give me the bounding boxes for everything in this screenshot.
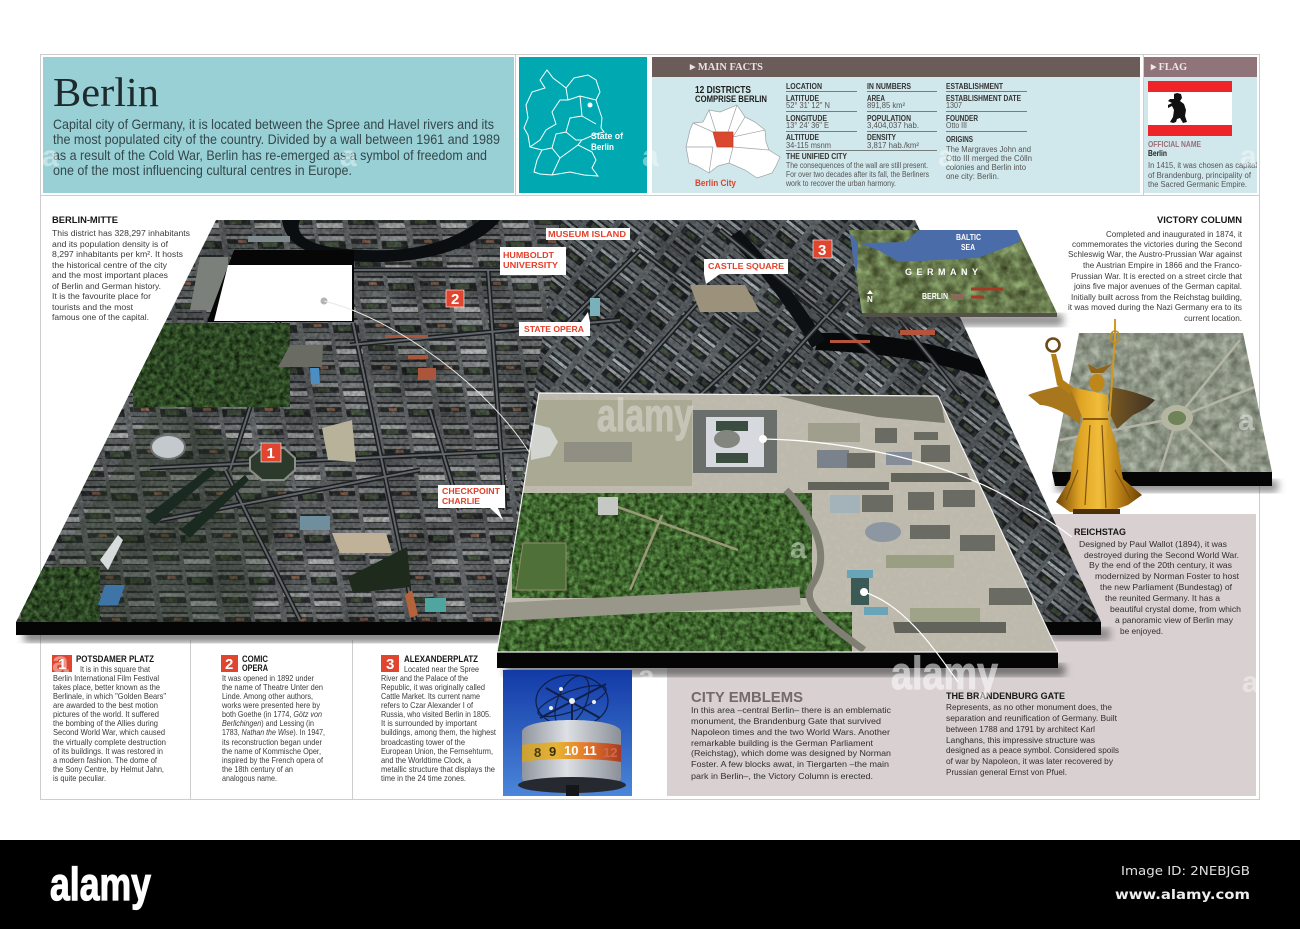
column 1: Potsdamer Platz: Berlin International Film Festival (53, 673, 159, 683)
column 2: Comic Opera: Linde. Among other authors, (222, 691, 313, 701)
text: The Brandenburg Gate: THE BRANDENBURG GATE (946, 691, 1066, 702)
label: Berlin City: Berlin City (695, 178, 737, 189)
text: Reichstag: Designed by Paul Wallot (1894), it was (1079, 539, 1227, 549)
column 3: Alexanderplatz: European Union, the Fernsehturm, (381, 746, 493, 756)
shadow under Reichstag map (505, 664, 1065, 676)
column 1: Potsdamer Platz: are awarded to the best motion (53, 700, 158, 710)
text: the unified city (785, 152, 929, 188)
facts: in numbers: POPULATION (867, 114, 911, 123)
raised arm (1051, 354, 1074, 394)
text: City Emblems: monument, the Brandenburg Gate that survived (691, 716, 881, 726)
heading: flag: ▸ FLAG (1150, 61, 1187, 73)
text: Berlin-Mitte: famous one of the capital. (52, 312, 149, 322)
districts heading: 12 DISTRICTS (695, 85, 751, 96)
avenue and roundabout (500, 596, 800, 612)
facts: in numbers (867, 82, 937, 150)
text: official name: In 1415, it was chosen as capital (1148, 161, 1257, 170)
aerial of roundabout (1050, 330, 1275, 475)
facts: location: ALTITUDE (786, 133, 820, 142)
column 3: Alexanderplatz: Russia, who visited Berlin in 1805. (381, 709, 491, 719)
text: Berlin-Mitte: of Berlin and German history. (52, 281, 161, 291)
alamy watermarks: a (340, 140, 357, 173)
text: Berlin-Mitte: and the most important places (52, 270, 168, 280)
text: Berlin-Mitte: tourists and the most (52, 302, 134, 312)
left wing (1028, 384, 1082, 425)
text: The Brandenburg Gate: between 1788 and 1791 by architect Karl (946, 724, 1095, 734)
canal (41, 567, 100, 620)
facts: in numbers: 3,404,037 hab. (867, 121, 919, 130)
label: Checkpoint Charlie: CHARLIE (442, 496, 480, 506)
text: Reichstag: beautiful crystal dome, from which (1110, 604, 1241, 614)
Berlin area marker (951, 294, 963, 300)
text: City Emblems: Napoleon times and the two World Wars. Another (691, 727, 890, 737)
text: Berlin-Mitte: the historical centre of the city (52, 260, 168, 270)
right wing (1108, 387, 1155, 429)
text: the unified city: For over two decades after its fall, the Berliners (786, 170, 929, 179)
label: Checkpoint Charlie: CHECKPOINT (442, 486, 501, 496)
marker 2: 2 (451, 291, 459, 308)
marker 3: 3 (818, 242, 826, 259)
column 2: Comic Opera: the name of Kommische Oper, (222, 746, 321, 756)
text: Berlin-Mitte: This district has 328,297 inhabitants (52, 228, 190, 238)
facts: in numbers: 891,85 km² (867, 101, 905, 110)
inset: Victory Column (1028, 319, 1278, 514)
text: official name: of Brandenburg, principality of (1148, 171, 1252, 180)
Spree bend (779, 396, 945, 423)
hour numbers: 9 (549, 744, 556, 759)
label: State of Berlin: Berlin (591, 142, 614, 152)
text: official name: OFFICIAL NAME (1148, 140, 1202, 149)
greener south-west (16, 400, 290, 622)
website: www.alamy.com (1115, 888, 1250, 903)
column 1: Potsdamer Platz: takes place, better known as the (53, 682, 160, 692)
facts: location: LOCATION (786, 82, 822, 91)
facts: in numbers: AREA (867, 94, 885, 103)
facts: establishment: 1307 (946, 101, 962, 110)
column 2: Comic Opera: both Goethe (in 1774, Götz von (222, 709, 322, 719)
label: Humboldt University (500, 247, 566, 275)
facts: in numbers: 3,817 hab./km² (867, 141, 919, 150)
open sandy ground (332, 533, 392, 553)
Brandenburg Gate dot (860, 588, 868, 596)
Spree river (282, 220, 500, 262)
Reichstag (693, 410, 777, 473)
text: Victory Column: current location. (1184, 313, 1242, 323)
text: Berlin-Mitte: BERLIN-MITTE (52, 215, 119, 226)
blue and coloured roofs (310, 368, 320, 384)
badge 2: 2 (225, 656, 233, 673)
column 3: Alexanderplatz: Republic, it was originally called (381, 682, 485, 692)
hour numbers: 12 (603, 745, 617, 760)
heading: ALEXANDERPLATZ (404, 654, 478, 665)
column 1: Potsdamer Platz: the bombing of the Allies during (53, 718, 158, 728)
heading: OPERA (242, 663, 268, 674)
facts: establishment: Otto III merged the Cölln (946, 154, 1032, 163)
heading: main facts: ▸ MAIN FACTS (689, 61, 763, 73)
text: official name (1148, 140, 1257, 189)
text: official name: the Sacred Germanic Empire. (1148, 180, 1247, 189)
badge 1: 1 (58, 656, 66, 673)
column 2: Comic Opera: its reconstruction began under (222, 737, 322, 747)
label: Castle Square (704, 259, 788, 284)
label: Humboldt University: UNIVERSITY (503, 260, 558, 270)
map side base (16, 622, 1101, 635)
inset map: Germany and the Baltic Sea (840, 225, 1065, 326)
facts: location: 34-115 msnm (786, 141, 831, 150)
leader line: Brandenburg Gate (864, 592, 958, 682)
map: Berlin districts (686, 105, 780, 178)
location dot (320, 298, 328, 304)
staff (1108, 319, 1115, 439)
text: Berlin-Mitte: and its population density is of (52, 239, 169, 249)
facts: establishment: ESTABLISHMENT (946, 82, 1003, 91)
text: Reichstag: REICHSTAG (1074, 527, 1126, 538)
text: Reichstag: modernized by Norman Foster to host (1095, 571, 1240, 581)
column 3: Alexanderplatz: buildings, among them, the highest (381, 727, 497, 737)
facts: establishment: ESTABLISHMENT DATE (946, 94, 1022, 103)
column 3: Alexanderplatz: refers to Czar Alexander I of (381, 700, 474, 710)
text: Reichstag: destroyed during the Second World War. (1084, 550, 1239, 560)
cut-out panel for Berlin-Mitte text (207, 250, 354, 322)
government district buildings (808, 423, 1032, 633)
facts: establishment: The Margraves John and (946, 145, 1031, 154)
column 2: Comic Opera: analogous name. (222, 773, 277, 783)
alamy watermarks: a (1238, 404, 1255, 437)
label: State of Berlin (591, 131, 624, 152)
alamy watermarks: a (638, 660, 655, 693)
text: Victory Column: it was moved during the Nazi Germany era to its (1068, 302, 1242, 312)
marker 1 (261, 443, 281, 462)
alamy watermarks: a (938, 140, 955, 173)
column 3: Alexanderplatz: River and the Palace of the (381, 673, 468, 683)
text: Victory Column: the Austrian Empire in 1866 and the Franco- (1083, 260, 1242, 270)
detail map: Reichstag and Brandenburg Gate (490, 390, 1065, 668)
panel: Germany locator map (519, 57, 647, 193)
major streets: carriageway (150, 230, 960, 620)
Tiergarten park (133, 323, 290, 407)
robe folds (1066, 425, 1130, 508)
main map: Berlin-Mitte aerial view (0, 220, 1110, 635)
label: State of Berlin: State of (591, 131, 624, 141)
panel: main facts (652, 57, 1140, 193)
text: Victory Column: VICTORY COLUMN (1157, 215, 1242, 226)
red river labels (971, 289, 1003, 297)
hours band (522, 742, 621, 762)
facts: establishment: Otto III (946, 121, 967, 130)
Sony Centre dome (151, 435, 185, 459)
text: The Brandenburg Gate: Represents, as no other monument does, the (946, 702, 1112, 712)
city label: BERLIN (922, 292, 948, 301)
label: State Opera (519, 312, 590, 336)
column 1: Potsdamer Platz: Berlinale, in which "Golden Bears" (53, 691, 166, 701)
aerial surface (0, 220, 1110, 622)
photo: Worldtime Clock (503, 670, 632, 797)
text: Berlin-Mitte: It is the favourite place for (52, 291, 151, 301)
heading (242, 654, 268, 674)
panel: title and introduction (43, 57, 514, 193)
facts: establishment (946, 82, 1032, 181)
text: City Emblems: In this area –central Berlin– there is an emblematic (691, 705, 892, 715)
label: Castle Square: CASTLE SQUARE (708, 261, 784, 271)
text: City Emblems: CITY EMBLEMS (691, 689, 803, 706)
facts: establishment: FOUNDER (946, 114, 978, 123)
facts: location (786, 82, 937, 150)
heading: COMIC (242, 654, 268, 665)
text: Victory Column (1068, 215, 1243, 323)
text: City Emblems: park in Berlin–, the Victory Column is erected. (691, 771, 873, 781)
text: Reichstag (1074, 527, 1241, 636)
alamy watermarks: alamy (891, 647, 998, 699)
text: Victory Column: Completed and inaugurated in 1874, it (1106, 229, 1243, 239)
label: Humboldt University: HUMBOLDT (503, 250, 555, 260)
alamy watermarks: a (1240, 140, 1257, 173)
facts: location: 13° 24' 36" E (786, 121, 829, 130)
statue: Goddess Victoria (1028, 319, 1155, 514)
Tiergarten forest (512, 493, 812, 598)
head and helmet (1090, 374, 1104, 392)
column 1: Potsdamer Platz: a modern fashion. The dome of (53, 755, 158, 765)
column 1: Potsdamer Platz: the Sony Centre, by Helmut Jahn, (53, 764, 164, 774)
text: City Emblems: remarkable building is the German Parliament (691, 738, 874, 748)
column 2: Comic Opera: the 18th century of an (222, 764, 293, 774)
text: Victory Column: Prussian War. It is erected on a street circle that (1071, 271, 1243, 281)
text: Berlin-Mitte: 8,297 inhabitants per km². It hosts (52, 249, 183, 259)
inset base (1052, 472, 1272, 486)
alamy watermarks: a (52, 646, 69, 679)
text: Reichstag: be enjoyed. (1120, 626, 1163, 636)
leader line: Reichstag (763, 439, 1072, 537)
robe (1056, 387, 1142, 514)
column 2: Comic Opera: works were presented here by (221, 700, 321, 710)
green patches (21, 567, 100, 622)
text: Reichstag: By the end of the 20th century, it was (1089, 560, 1232, 570)
column 3: Alexanderplatz: and the Worldtime Clock, a (381, 755, 471, 765)
column 1: Potsdamer Platz: is quite peculiar. (53, 773, 106, 783)
footer logo: alamy (50, 858, 151, 910)
hour numbers: 10 (564, 743, 578, 758)
text: the unified city: The consequences of the wall are still present. (786, 161, 928, 170)
hour numbers: 8 (534, 745, 541, 760)
panel: flag (1144, 57, 1257, 193)
facts: location: 52° 31' 12" N (786, 101, 830, 110)
text: The Brandenburg Gate: Langhans, this impressive structure was (946, 735, 1095, 745)
Brandenburg Gate (851, 578, 869, 605)
plinth (1073, 509, 1120, 514)
column 1: Potsdamer Platz: the virtually complete destruction (53, 737, 166, 747)
armillary sphere (535, 674, 609, 722)
text: City Emblems (691, 689, 892, 781)
label: Checkpoint Charlie (438, 485, 505, 520)
text: Victory Column: Schleswig War, the Austro-Prussian War against (1068, 249, 1243, 259)
text: Victory Column: joins five major avenues of the German capital. (1073, 281, 1242, 291)
text: City Emblems: Foster. A few blocks awat, in Tiergarten –the main (691, 759, 889, 769)
clock drum (522, 720, 621, 782)
marker 3 (813, 240, 832, 259)
alamy watermarks: alamy (597, 389, 693, 441)
column 3: Alexanderplatz: Cattle Market. Its current name (381, 691, 480, 701)
facts: establishment: colonies and Berlin into (946, 163, 1027, 172)
heading: POTSDAMER PLATZ (76, 654, 154, 665)
text: The Brandenburg Gate: of war by Napoleon, it was later recovered by (946, 756, 1114, 766)
white edge of detail map (497, 393, 1058, 652)
image id: Image ID: 2NEBJGB (1121, 864, 1250, 878)
text: Victory Column: commemorates the victories during the Second (1072, 239, 1242, 249)
label: Museum Island: MUSEUM ISLAND (548, 229, 626, 239)
text: The Brandenburg Gate: Prussian general Ernst von Pfuel. (946, 767, 1067, 777)
column 3: Alexanderplatz: It is surrounded by important (381, 718, 478, 728)
column 3: Alexanderplatz: Located near the Spree (404, 664, 479, 674)
marker 2 (446, 290, 464, 308)
text: the unified city: THE UNIFIED CITY (786, 152, 848, 161)
alamy watermarks (42, 140, 1259, 699)
Potsdamer Platz octagon (250, 448, 295, 480)
text: the unified city: work to recover the urban harmony. (785, 179, 896, 188)
map labels and number markers (261, 228, 832, 520)
footer band (0, 840, 1300, 929)
facts: location: LONGITUDE (786, 114, 828, 123)
facts: in numbers: IN NUMBERS (867, 82, 912, 91)
badge 3: 3 (386, 656, 394, 673)
shadow under main map (24, 630, 504, 642)
column 3: Alexanderplatz: broadcasting tower of the (381, 737, 465, 747)
column 2: Comic Opera: 1783, Nathan the Wise). In 1947, (222, 727, 325, 737)
Baltic Sea (858, 229, 1020, 262)
plaza (520, 400, 692, 486)
country label: GERMANY (905, 267, 978, 277)
introduction text: one of the most influencing cultural centres in Europe. (53, 162, 352, 178)
paths in forest (615, 506, 738, 590)
north arrow (867, 290, 873, 304)
page frame (40, 54, 1260, 800)
column 1: Potsdamer Platz: Second World War, which caused (53, 727, 165, 737)
introduction text (53, 116, 500, 178)
text: City Emblems: (Reichstag), which dome was designed by Norman (691, 748, 891, 758)
column 3: Alexanderplatz: time in the 24 time zones. (381, 773, 466, 783)
column 2: Comic Opera: inspired by the French opera of (222, 755, 324, 765)
introduction text: Capital city of Germany, it is located between the Spree and Havel rivers and its (53, 116, 494, 132)
text: official name: Berlin (1148, 148, 1167, 158)
alamy watermarks: a (642, 140, 659, 173)
hour numbers (534, 746, 617, 757)
column 2: Comic Opera: Berlichingen) and Lessing (in (222, 718, 314, 728)
map of Germany (524, 70, 604, 176)
title: Berlin (53, 69, 159, 115)
districts heading (695, 85, 767, 104)
column 1: Potsdamer Platz: It is in this square that (80, 664, 151, 674)
column 3: Alexanderplatz: metallic structure that displays the (381, 764, 495, 774)
facts: location: LATITUDE (786, 94, 820, 103)
text: The Brandenburg Gate: designed as a peace symbol. Considered spoils (946, 745, 1119, 755)
column 1: Potsdamer Platz: of its buildings. It was restored in (53, 746, 163, 756)
introduction text: as a result of the Cold War, Berlin has re-emerged as a symbol of freedom and (53, 147, 487, 163)
text: Berlin-Mitte (52, 215, 190, 322)
text: The Brandenburg Gate: separation and reunification of Germany. Built (946, 713, 1118, 723)
column 2: Comic Opera (221, 654, 325, 783)
facts: in numbers: DENSITY (867, 133, 897, 142)
facts: establishment: one city: Berlin. (946, 172, 999, 181)
text: Reichstag: a panoramic view of Berlin may (1115, 615, 1234, 625)
detail map base (497, 652, 1058, 668)
districts heading: COMPRISE BERLIN (695, 94, 767, 104)
facts: establishment: ORIGINS (946, 135, 974, 144)
north arrow: N (867, 295, 873, 304)
sea label (956, 233, 981, 252)
Reichstag dot (759, 435, 767, 443)
Berlin marker (588, 102, 592, 108)
icon: flag of Berlin with bear (1148, 81, 1232, 136)
drum underside (518, 777, 626, 793)
alamy watermarks: a (42, 140, 59, 173)
sea label: SEA (961, 243, 975, 252)
label: State Opera: STATE OPERA (524, 324, 584, 334)
hour numbers: 11 (583, 743, 597, 758)
column 3: Alexanderplatz (381, 654, 497, 783)
text: Victory Column: Initially built across from the Reichstag building, (1071, 292, 1242, 302)
alamy watermarks: a (790, 532, 807, 565)
wreath (1046, 338, 1060, 352)
major streets: shadow (150, 230, 960, 620)
text: Reichstag: the new Parliament (Bundestag) of (1100, 582, 1233, 592)
column 2: Comic Opera: It was opened in 1892 under (222, 673, 314, 683)
marker 1: 1 (266, 445, 275, 462)
column 2: Comic Opera: the name of Theatre Unter den (222, 682, 323, 692)
text: Reichstag: the reunited Germany. It has a (1105, 593, 1220, 603)
column 1: Potsdamer Platz: pictures of the world. It suffered (53, 709, 159, 719)
panel: city emblems background (667, 514, 1256, 796)
text: The Brandenburg Gate (946, 691, 1119, 777)
introduction text: the most populated city of the country. Divided by a wall between 1961 and 1989 (53, 131, 500, 147)
leader line: Berlin-Mitte (324, 301, 529, 452)
alamy watermarks: a (1242, 666, 1259, 699)
column 1: Potsdamer Platz (52, 654, 166, 783)
sea label: BALTIC (956, 233, 981, 242)
